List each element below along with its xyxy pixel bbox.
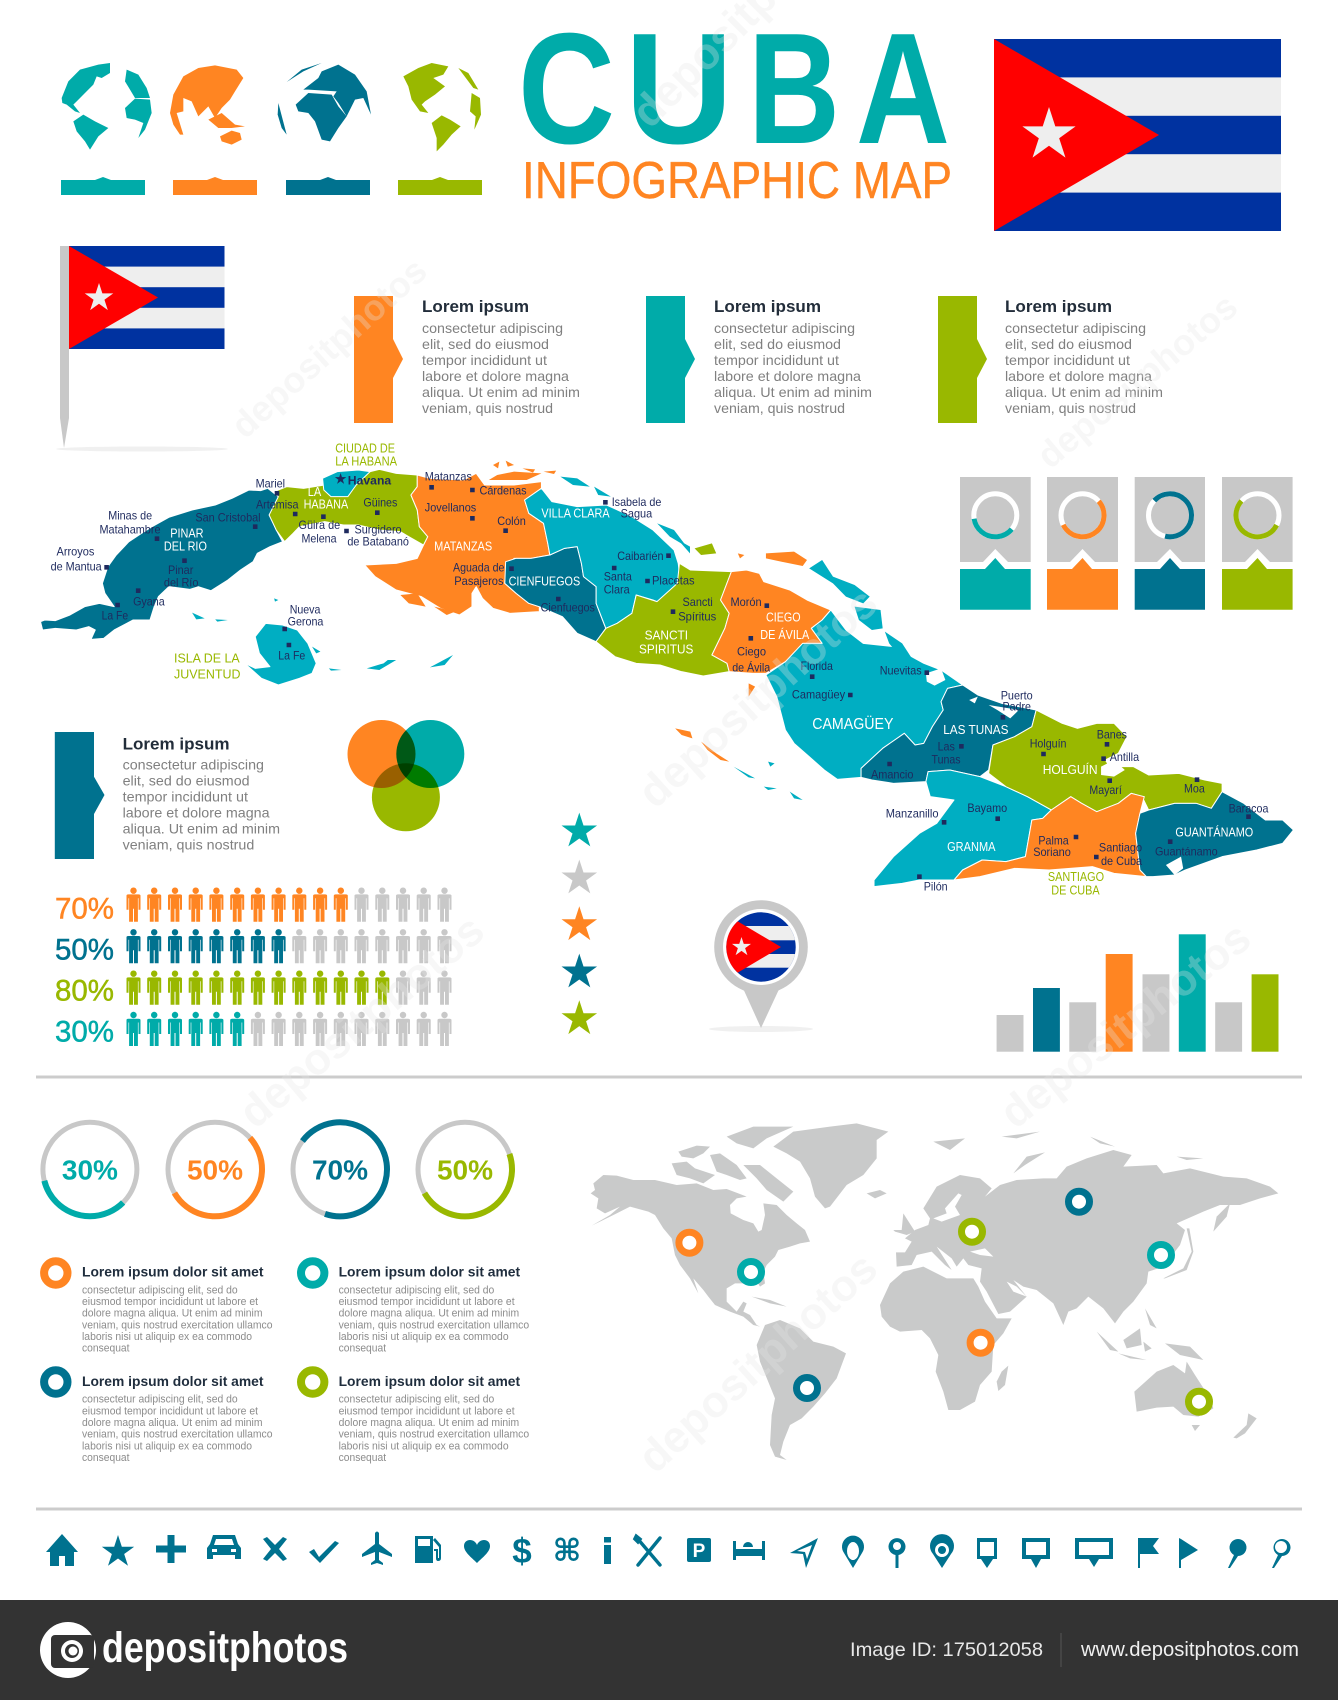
- icon: small pin: [888, 1538, 906, 1568]
- map labels: Mayarí: [1089, 783, 1122, 797]
- legend item: orange: laboris nisi ut aliquip ex ea commodo: [82, 1331, 252, 1343]
- map labels: CIENFUEGOS: [509, 575, 580, 589]
- legend item: teal: laboris nisi ut aliquip ex ea commodo: [339, 1331, 509, 1343]
- icon: car: [207, 1535, 241, 1559]
- map labels: SANCTI: [645, 628, 688, 642]
- map labels: Melena: [302, 531, 337, 545]
- map labels: Pilón: [924, 880, 948, 894]
- Tasmania and New Zealand: [1192, 1413, 1257, 1438]
- globes row: [62, 63, 481, 151]
- map labels: Puerto: [1001, 688, 1033, 702]
- map labels: Caibarién: [617, 549, 664, 563]
- text block: green: Lorem ipsum: [1005, 297, 1112, 316]
- map labels: Holguín: [1030, 736, 1066, 750]
- legend item: green: veniam, quis nostrud exercitation ullamco: [339, 1429, 529, 1441]
- ring: 70%: 70%: [312, 1154, 368, 1185]
- legend item: orange: Lorem ipsum dolor sit amet: [82, 1264, 264, 1280]
- map labels: Güines: [363, 495, 397, 509]
- stars column: [562, 813, 597, 1034]
- title: C: [518, 1, 615, 177]
- text block: green: veniam, quis nostrud: [1005, 400, 1136, 416]
- map labels: Padre: [1002, 700, 1031, 714]
- venn diagram: [348, 720, 464, 831]
- map labels: Placetas: [652, 574, 695, 588]
- ring: 30%: [23, 1103, 156, 1236]
- ring: 70%: [274, 1103, 406, 1235]
- map labels: LA: [308, 485, 322, 499]
- map labels: DE CUBA: [1051, 883, 1100, 897]
- legend item: dark teal: eiusmod tempor incididunt ut labore et: [82, 1405, 258, 1417]
- text block: teal: [646, 296, 872, 423]
- title: [518, 1, 950, 177]
- legend item: green: consequat: [339, 1452, 386, 1464]
- map labels: Santiago: [1099, 841, 1142, 855]
- map labels: Las: [938, 740, 955, 754]
- Kamchatka: [1213, 1203, 1230, 1232]
- text block: orange: aliqua. Ut enim ad minim: [422, 384, 580, 400]
- legend item: green: [301, 1370, 529, 1464]
- text block: dark teal: labore et dolore magna: [123, 804, 270, 820]
- text block: dark teal: tempor incididunt ut: [123, 788, 248, 804]
- legend item: teal: consequat: [339, 1343, 386, 1355]
- row: 30%: 30%: [55, 1016, 114, 1049]
- legend item: teal: Lorem ipsum dolor sit amet: [339, 1264, 520, 1280]
- province: Granma: [874, 770, 1051, 887]
- text block: orange: veniam, quis nostrud: [422, 400, 553, 416]
- watermarks: depositphotos: [629, 578, 887, 817]
- text block: green: [938, 296, 1163, 423]
- legend item: teal: consectetur adipiscing elit, sed do: [339, 1284, 494, 1296]
- text block: teal: aliqua. Ut enim ad minim: [714, 384, 872, 400]
- legend item: orange: [44, 1261, 272, 1355]
- province: Las Tunas: [861, 685, 1036, 783]
- text block: green: aliqua. Ut enim ad minim: [1005, 384, 1163, 400]
- icon: home: [46, 1534, 78, 1566]
- map labels: HOLGUÍN: [1043, 762, 1098, 777]
- map labels: Sancti: [682, 595, 713, 609]
- map labels: Jovellanos: [425, 501, 476, 515]
- icon: wide speech bubble: [1075, 1538, 1113, 1567]
- text block: orange: consectetur adipiscing: [422, 320, 563, 336]
- text block: orange: labore et dolore magna: [422, 368, 569, 384]
- row: 80%: 80%: [55, 975, 114, 1008]
- icon: plane: [362, 1532, 392, 1565]
- icon: flag: [1138, 1538, 1159, 1568]
- map labels: Spíritus: [678, 610, 716, 624]
- eastern cays: [734, 560, 915, 800]
- text block: dark teal: aliqua. Ut enim ad minim: [123, 820, 280, 836]
- map labels: Guantánamo: [1155, 845, 1218, 859]
- icon: tag pin: [977, 1538, 997, 1568]
- Iceland: [867, 1190, 887, 1198]
- map labels: Morón: [730, 595, 762, 609]
- map labels: Antilla: [1110, 750, 1139, 764]
- image id: Image ID: 175012058: [850, 1639, 1043, 1661]
- icon: bed: [733, 1541, 765, 1560]
- Arctic islands: [672, 1127, 793, 1202]
- text block: green: elit, sed do eiusmod: [1005, 336, 1132, 352]
- map labels: de Ávila: [732, 660, 770, 675]
- map labels: Manzanillo: [886, 806, 939, 820]
- text block: teal: labore et dolore magna: [714, 368, 861, 384]
- text block: orange: Lorem ipsum: [422, 297, 529, 316]
- legend list: [44, 1261, 529, 1464]
- icon: info: [604, 1537, 611, 1564]
- map labels: Sagua: [621, 506, 652, 520]
- legend item: orange: dolore magna aliqua. Ut enim ad minim: [82, 1308, 262, 1320]
- world map: [591, 1123, 1278, 1460]
- map of Cuba: [41, 442, 1293, 897]
- watermarks: depositphotos: [230, 905, 494, 1138]
- legend item: dark teal: Lorem ipsum dolor sit amet: [82, 1373, 264, 1389]
- map labels: Cienfuegos: [541, 601, 595, 615]
- watermarks: depositphotos: [223, 250, 435, 446]
- Arctic islands: [933, 1132, 1203, 1160]
- text block: teal: Lorem ipsum: [714, 297, 821, 316]
- globe: teal: [62, 63, 152, 150]
- legend item: green: laboris nisi ut aliquip ex ea commodo: [339, 1440, 509, 1452]
- row: 70%: [55, 888, 452, 925]
- text block: teal: veniam, quis nostrud: [714, 400, 845, 416]
- map labels: LA HABANA: [335, 455, 398, 469]
- globe: green: [403, 63, 481, 151]
- western hemisphere: [591, 1123, 888, 1460]
- watermarks: [223, 0, 1260, 1482]
- text block: green: tempor incididunt ut: [1005, 352, 1130, 368]
- legend item: teal: eiusmod tempor incididunt ut labore et: [339, 1296, 515, 1308]
- map labels: Baracoa: [1229, 802, 1269, 816]
- text block: dark teal: elit, sed do eiusmod: [123, 772, 250, 788]
- map labels: Moa: [1184, 781, 1205, 795]
- watermarks: depositphotos: [629, 1243, 887, 1482]
- icon: heart: [464, 1540, 490, 1563]
- row: 80%: [55, 970, 452, 1008]
- legend item: orange: eiusmod tempor incididunt ut labore et: [82, 1296, 258, 1308]
- text block: orange: elit, sed do eiusmod: [422, 336, 549, 352]
- eastern provinces: [596, 543, 1293, 887]
- icon: hollow lollipop pin: [1272, 1539, 1290, 1568]
- large Cuban flag: [994, 39, 1281, 231]
- icon: dollar: $: [512, 1532, 532, 1571]
- North America: [591, 1175, 810, 1327]
- map labels: La Fe: [278, 648, 306, 662]
- map labels: Colón: [497, 514, 526, 528]
- globe: dark teal: [278, 63, 371, 141]
- text block: green: consectetur adipiscing: [1005, 320, 1146, 336]
- province: Matanzas: [365, 473, 550, 615]
- map labels: Tunas: [932, 752, 960, 766]
- legend item: teal: dolore magna aliqua. Ut enim ad minim: [339, 1308, 519, 1320]
- province: Villa Clara: [525, 488, 680, 628]
- legend item: dark teal: consequat: [82, 1452, 130, 1464]
- icon: parking: [687, 1538, 711, 1562]
- text block: dark teal: Lorem ipsum: [123, 734, 230, 753]
- province: Cienfuegos: [505, 547, 606, 642]
- legend item: orange: consectetur adipiscing elit, sed do: [82, 1284, 238, 1296]
- website: www.depositphotos.com: [1080, 1639, 1299, 1661]
- row: 50%: [55, 929, 452, 966]
- title: U: [625, 1, 733, 177]
- map labels: Cárdenas: [480, 483, 527, 497]
- ring: 50% green: 50%: [437, 1154, 493, 1185]
- legend item: orange: veniam, quis nostrud exercitation ullamco: [82, 1319, 272, 1331]
- map labels: SPIRITUS: [639, 642, 693, 656]
- watermarks: depositphotos: [1029, 285, 1245, 476]
- map labels: LAS TUNAS: [943, 723, 1008, 737]
- ring: 50% green: [405, 1110, 525, 1229]
- map labels: GRANMA: [947, 840, 996, 854]
- subtitle: INFOGRAPHIC MAP: [522, 152, 952, 210]
- city markers: [104, 485, 1251, 879]
- text block: dark teal: consectetur adipiscing: [123, 756, 264, 772]
- map labels: Bayamo: [967, 801, 1007, 815]
- bays and inlets: [926, 668, 1183, 875]
- map labels: DEL RIO: [164, 539, 207, 553]
- icon: speech bubble: [1022, 1538, 1050, 1568]
- legend item: teal: veniam, quis nostrud exercitation ullamco: [339, 1319, 529, 1331]
- legend item: green: consectetur adipiscing elit, sed do: [339, 1394, 494, 1406]
- text block: dark teal: [55, 732, 280, 859]
- text block: green: labore et dolore magna: [1005, 368, 1152, 384]
- icon: plus: [156, 1535, 186, 1563]
- title: A: [856, 1, 950, 177]
- legend item: dark teal: veniam, quis nostrud exercitation ullamco: [82, 1429, 272, 1441]
- eastern hemisphere: [880, 1132, 1278, 1438]
- icon: solid lollipop pin: [1228, 1539, 1246, 1568]
- province: Guantanamo: [1136, 792, 1293, 877]
- icon: command: ⌘: [553, 1533, 581, 1569]
- text block: teal: tempor incididunt ut: [714, 352, 839, 368]
- map labels: CIUDAD DE: [335, 442, 395, 456]
- icon: star: [102, 1535, 134, 1566]
- province: Santiago de Cuba: [954, 793, 1146, 880]
- map labels: de Mantua: [51, 559, 102, 573]
- legend item: green: dolore magna aliqua. Ut enim ad minim: [339, 1417, 519, 1429]
- icon strip: [46, 1532, 1290, 1571]
- Africa: [880, 1267, 1012, 1410]
- Novaya Zemlya: [1013, 1152, 1045, 1173]
- icon: parking: P: [693, 1541, 706, 1562]
- Australia: [1134, 1362, 1213, 1417]
- map labels: Mariel: [256, 477, 285, 491]
- map labels: PINAR: [170, 526, 204, 540]
- map labels: Pasajeros: [454, 574, 504, 588]
- province: Ciego de Avila: [712, 570, 831, 673]
- ring: 50% orange: 50%: [187, 1154, 243, 1185]
- globe base bars: [61, 177, 482, 195]
- map labels: del Río: [164, 576, 199, 590]
- map labels: SANTIAGO: [1048, 870, 1104, 884]
- map labels: Gyana: [133, 595, 165, 609]
- ring: 50% orange: [149, 1103, 281, 1236]
- watermarks: depositphotos: [991, 913, 1260, 1138]
- province: Isla de la Juventud: [245, 623, 316, 685]
- map labels: Palma: [1038, 834, 1069, 848]
- text block: orange: tempor incididunt ut: [422, 352, 547, 368]
- map labels: [51, 442, 1269, 897]
- text block: teal: elit, sed do eiusmod: [714, 336, 841, 352]
- location markers: [679, 1191, 1210, 1412]
- map labels: Ciego: [737, 645, 766, 659]
- map labels: Nuevitas: [880, 663, 922, 677]
- map labels: de Cuba: [1101, 854, 1142, 868]
- footer logo: depositphotos: [102, 1624, 348, 1672]
- map labels: Güira de: [298, 518, 340, 532]
- ring: 30%: 30%: [62, 1154, 118, 1185]
- icon: cross: [263, 1537, 287, 1561]
- map labels: Matanzas: [425, 470, 472, 484]
- Madagascar: [997, 1366, 1008, 1391]
- Greenland: [773, 1123, 888, 1208]
- map labels: GUANTÁNAMO: [1175, 825, 1253, 840]
- capital star: [335, 473, 346, 484]
- province: Camaguey: [766, 610, 963, 779]
- map labels: Minas de: [108, 508, 152, 522]
- flag location pin: [709, 900, 813, 1032]
- map labels: ISLA DE LA: [174, 651, 240, 665]
- map labels: MATANZAS: [434, 540, 492, 554]
- icon: pin: [842, 1536, 864, 1568]
- map labels: Camagüey: [792, 687, 845, 701]
- title: B: [748, 1, 840, 177]
- western cays: [400, 461, 556, 615]
- small flag on pole: [56, 246, 228, 452]
- Eurasia: [896, 1150, 1278, 1325]
- text block: orange: [354, 296, 580, 423]
- map labels: San Cristobal: [195, 511, 261, 525]
- people pictogram chart: [55, 888, 452, 1049]
- map labels: Matahambre: [100, 522, 161, 536]
- map labels: CIEGO: [766, 611, 801, 625]
- text block: dark teal: veniam, quis nostrud: [123, 836, 254, 852]
- map labels: Gerona: [288, 614, 324, 628]
- card: teal: [960, 477, 1031, 610]
- map labels: Surgidero: [354, 522, 402, 536]
- text block: teal: consectetur adipiscing: [714, 320, 855, 336]
- row: 50%: 50%: [55, 933, 114, 966]
- card: dark teal: [1135, 477, 1205, 610]
- legend item: green: Lorem ipsum dolor sit amet: [339, 1373, 520, 1389]
- legend item: dark teal: dolore magna aliqua. Ut enim ad minim: [82, 1417, 262, 1429]
- map labels: Havana: [348, 473, 392, 487]
- bar chart: [997, 934, 1278, 1052]
- province: Holguin: [989, 710, 1222, 812]
- footer logo: [40, 1622, 348, 1678]
- map labels: DE ÁVILA: [760, 627, 810, 642]
- legend item: dark teal: [44, 1370, 272, 1464]
- footer bar: [0, 1600, 1338, 1700]
- map labels: Amancio: [871, 767, 914, 781]
- map labels: Artemisa: [256, 497, 299, 511]
- map labels: VILLA CLARA: [541, 506, 610, 520]
- province: Pinar del Rio: [41, 488, 283, 639]
- map labels: de Batabanó: [347, 535, 409, 549]
- legend item: orange: consequat: [82, 1343, 130, 1355]
- province: La Habana: [269, 469, 428, 545]
- map labels: Soriano: [1033, 845, 1071, 859]
- icon: pennant: [1179, 1538, 1198, 1568]
- icon: check: [309, 1541, 339, 1563]
- map labels: Clara: [604, 582, 630, 596]
- map labels: Nueva: [290, 602, 321, 616]
- map labels: Isabela de: [612, 495, 662, 509]
- icon: navigation arrow: [790, 1538, 818, 1568]
- map labels: Banes: [1097, 727, 1127, 741]
- legend item: dark teal: consectetur adipiscing elit, sed do: [82, 1394, 238, 1406]
- province: Ciudad de La Habana: [323, 470, 370, 497]
- legend item: teal: [301, 1261, 529, 1355]
- card: orange: [1047, 477, 1118, 610]
- icon: cutlery: [634, 1535, 660, 1565]
- legend item: dark teal: laboris nisi ut aliquip ex ea commodo: [82, 1440, 252, 1452]
- Japan: [1163, 1228, 1193, 1278]
- card: green: [1222, 477, 1293, 610]
- map labels: La Fe: [102, 608, 128, 622]
- map labels: Arroyos: [56, 545, 94, 559]
- map labels: JUVENTUD: [174, 667, 240, 681]
- gray cards with progress rings: [960, 477, 1293, 610]
- Caribbean: [752, 1297, 787, 1307]
- legend item: green: eiusmod tempor incididunt ut labore et: [339, 1405, 515, 1417]
- map labels: Florida: [800, 659, 833, 673]
- map labels: Pinar: [168, 563, 193, 577]
- row: 30%: [55, 1012, 452, 1049]
- inland seas: [933, 1193, 1027, 1297]
- globe: orange: [170, 65, 245, 145]
- map labels: HABANA: [304, 498, 349, 512]
- map labels: Santa: [604, 569, 632, 583]
- percentage rings: [23, 1103, 525, 1236]
- province: Sancti Spiritus: [596, 563, 731, 676]
- map labels: CAMAGÜEY: [812, 715, 894, 733]
- United Kingdom: [893, 1213, 915, 1235]
- icon: target pin: [930, 1534, 954, 1568]
- icon: fuel pump: [415, 1536, 441, 1563]
- western provinces: [41, 461, 690, 685]
- row: 70%: 70%: [55, 892, 114, 925]
- South America: [757, 1320, 846, 1460]
- map labels: Aguada de: [453, 560, 505, 574]
- Southeast Asia islands: [1097, 1308, 1203, 1360]
